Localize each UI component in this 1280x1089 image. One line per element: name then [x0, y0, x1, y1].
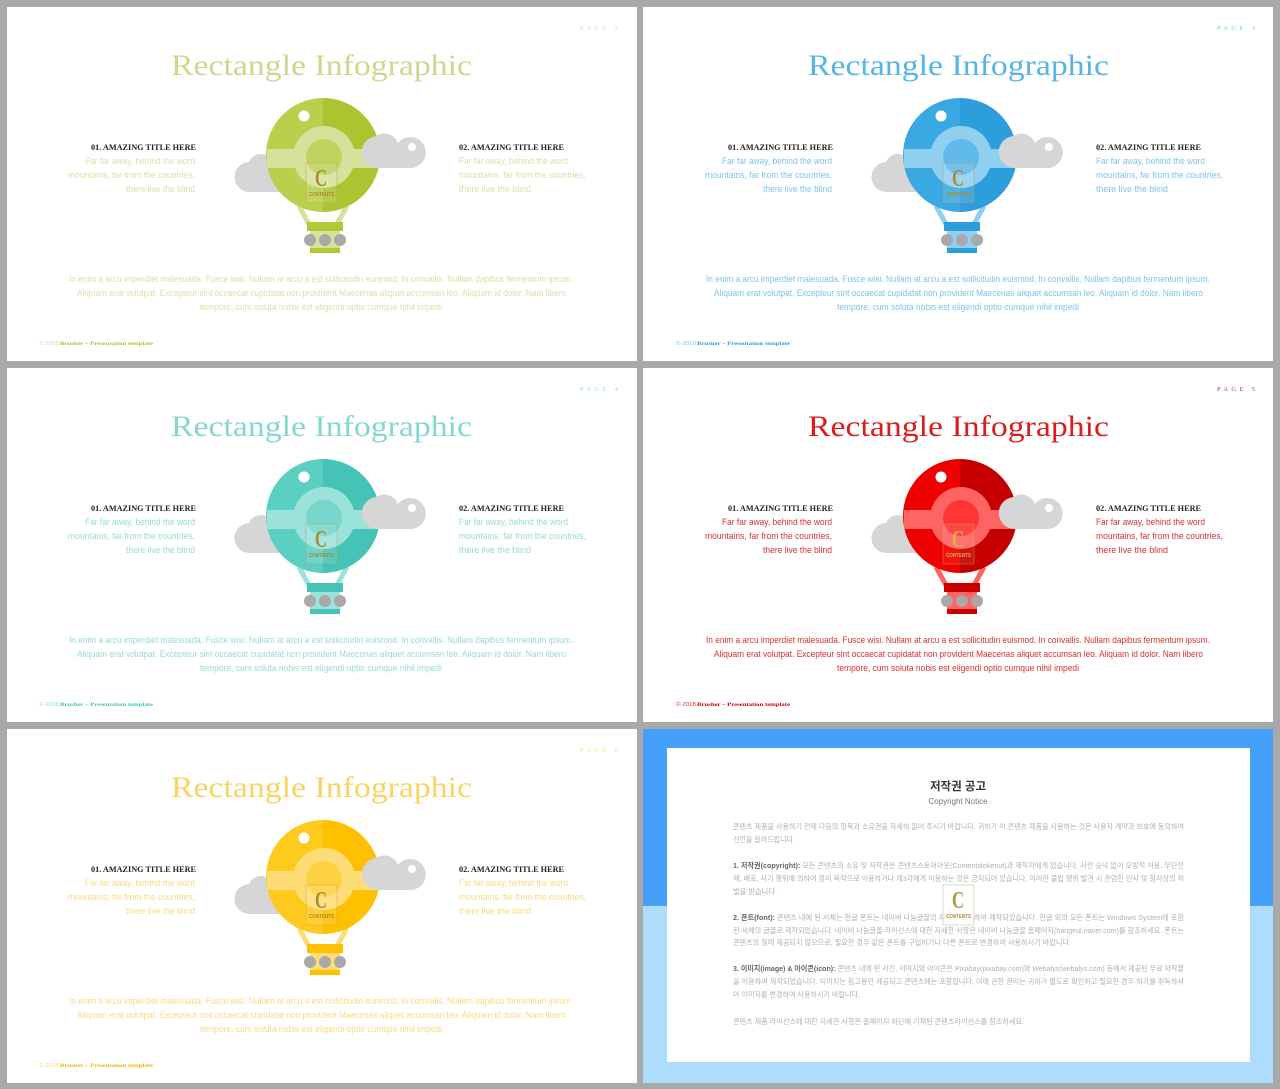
page number: PAGE 5: [1217, 386, 1255, 393]
page number: PAGE 2: [580, 25, 618, 32]
title: Rectangle Infographic: [171, 771, 472, 804]
body paragraph: In enim a arcu imperdiet malesuada. Fusce wisi. Nullam at arcu a est sollicitudin euismod. In convallis. Nullam dapibus fermentum ipsum.: [69, 274, 573, 284]
left text block: there live the blind: [763, 184, 832, 194]
right text block: Far far away, behind the word: [459, 878, 568, 888]
body paragraph: Aliquam erat volutpat. Excepteur sint occaecat cupidatat non provident Maecenas aliquet accumsan leo. Aliquam id dolor. Nam libero: [77, 1010, 566, 1020]
page number: PAGE 6: [580, 747, 619, 754]
left text block: 01. AMAZING TITLE HERE: [91, 503, 196, 513]
right text block: Far far away, behind the word: [1096, 156, 1205, 166]
body paragraph: In enim a arcu imperdiet malesuada. Fusce wisi. Nullam at arcu a est sollicitudin euismod. In convallis. Nullam dapibus fermentum ipsum.: [69, 996, 573, 1006]
right text block: there live the blind: [1096, 184, 1168, 194]
body paragraph: [69, 635, 573, 673]
body paragraph: [69, 274, 573, 312]
title: Rectangle Infographic: [171, 49, 472, 82]
right text block: 02. AMAZING TITLE HERE: [459, 142, 564, 152]
left text block: 01. AMAZING TITLE HERE: [91, 142, 196, 152]
body paragraph: tempore, cum soluta nobis est eligendi optio cumque nihil impedi: [837, 302, 1079, 312]
footer: Brusher – Presentation template: [60, 1063, 154, 1069]
body paragraph: In enim a arcu imperdiet malesuada. Fusce wisi. Nullam at arcu a est sollicitudin euismod. In convallis. Nullam dapibus fermentum ipsum.: [706, 635, 1210, 645]
watermark logo: C: [952, 527, 964, 553]
left text block: Far far away, behind the word: [85, 878, 195, 888]
section 3: image and icon: 야 이미지를 변경하여 사용하시기 바랍니다.: [733, 989, 860, 999]
title: Rectangle Infographic: [171, 410, 472, 443]
watermark logo: C: [315, 888, 327, 914]
footer: [676, 701, 791, 708]
right text block: Far far away, behind the word: [459, 156, 568, 166]
panel: blue slide: [643, 7, 1273, 361]
icon: hot air balloon with clouds: [871, 98, 1063, 253]
right text block: [459, 864, 586, 916]
section 1: copyright: 1. 저작권(copyright): 모든 콘텐츠의 소유 및 저작권은 콘텐츠스토어아웃(Contentstokeout)과 제작자에게 있습니다. 사전 승낙 없이 모방적 이용, 무단전: [733, 860, 1184, 870]
title: Rectangle Infographic: [808, 410, 1109, 443]
watermark logo: [943, 524, 974, 564]
right text block: there live the blind: [459, 906, 531, 916]
right text block: mountains, far from the countries,: [459, 170, 586, 180]
left text block: [705, 142, 833, 194]
left text block: [68, 142, 196, 194]
footer: © 2018: [39, 1062, 59, 1069]
footer: [39, 340, 154, 347]
left text block: Far far away, behind the word: [85, 156, 195, 166]
watermark logo: CONTENTS: [309, 914, 335, 920]
watermark logo: CONTENTS: [946, 192, 972, 198]
right text block: Far far away, behind the word: [1096, 517, 1205, 527]
body paragraph: Aliquam erat volutpat. Excepteur sint occaecat cupidatat non provident Maecenas aliquet accumsan leo. Aliquam id dolor. Nam libero: [77, 649, 566, 659]
left text block: there live the blind: [126, 906, 195, 916]
right text block: 02. AMAZING TITLE HERE: [1096, 142, 1201, 152]
section 3: image and icon: [733, 963, 1184, 999]
right text block: 02. AMAZING TITLE HERE: [459, 503, 564, 513]
left text block: there live the blind: [763, 545, 832, 555]
right text block: there live the blind: [459, 184, 531, 194]
left text block: there live the blind: [126, 184, 195, 194]
body paragraph: [69, 996, 573, 1034]
footer: [39, 1062, 154, 1069]
panel: copyright notice: [643, 729, 1273, 1083]
left text block: mountains, far from the countries,: [68, 170, 195, 180]
watermark logo: CONTENTS: [309, 192, 335, 198]
section 1: copyright: [733, 860, 1184, 896]
title: Rectangle Infographic: [808, 49, 1109, 82]
right text block: [459, 503, 586, 555]
watermark logo: [306, 163, 337, 203]
icon: hot air balloon with clouds: [234, 98, 426, 253]
body paragraph: [706, 635, 1210, 673]
left text block: 01. AMAZING TITLE HERE: [728, 503, 833, 513]
section 1: copyright: 재, 배포, 사기 행위에 의하여 영리 목적으로 이용하거나 제3자에게 이용하는 것은 금지되어 있습니다. 이러한 불법 행위 발견 시 준엄한 민사 및 형사상의 처: [733, 873, 1184, 883]
footer: © 2018: [39, 701, 59, 708]
panel: yellow slide: [7, 729, 637, 1083]
watermark logo: CONTENTS: [946, 914, 972, 920]
footer: Brusher – Presentation template: [60, 341, 154, 347]
watermark logo: C: [315, 527, 327, 553]
section 2: font: 콘텐츠의 형태 제공되지 않으므로, 필요한 경우 같은 폰트를 구입하거나 다른 폰트로 변경하여 사용하시기 바랍니다.: [733, 937, 1071, 947]
watermark logo: C: [952, 888, 964, 914]
section 1: copyright: 벌을 받습니다.: [733, 886, 777, 896]
body paragraph: In enim a arcu imperdiet malesuada. Fusce wisi. Nullam at arcu a est sollicitudin euismod. In convallis. Nullam dapibus fermentum ipsum.: [706, 274, 1210, 284]
intro paragraph: 선언을 알려드립니다.: [733, 834, 795, 844]
left text block: 01. AMAZING TITLE HERE: [728, 142, 833, 152]
watermark logo: [306, 524, 337, 564]
body paragraph: tempore, cum soluta nobis est eligendi optio cumque nihil impedi: [200, 302, 442, 312]
body paragraph: tempore, cum soluta nobis est eligendi optio cumque nihil impedi: [200, 1024, 442, 1034]
intro paragraph: 콘텐츠 제품을 사용하기 전에 다음의 항목과 소유권을 자세히 읽어 주시기 바랍니다. 귀하가 이 콘텐츠 제품을 사용하는 것은 사용자 계약과 보호에 동의하여: [733, 821, 1184, 831]
footer: Brusher – Presentation template: [697, 341, 791, 347]
left text block: there live the blind: [126, 545, 195, 555]
footer: © 2018: [39, 340, 59, 347]
right text block: mountains, far from the countries,: [1096, 531, 1223, 541]
panel: red slide: [643, 368, 1273, 722]
left text block: Far far away, behind the word: [722, 517, 832, 527]
watermark logo: CONTENTS: [309, 553, 335, 559]
left text block: [68, 503, 196, 555]
left text block: Far far away, behind the word: [85, 517, 195, 527]
right text block: mountains, far from the countries,: [459, 892, 586, 902]
right text block: 02. AMAZING TITLE HERE: [1096, 503, 1201, 513]
body paragraph: [706, 274, 1210, 312]
right text block: Far far away, behind the word: [459, 517, 568, 527]
section 2: font: 된 서체의 글꼴로 제작되었습니다. 네이버 나눔글꼴 라이선스에 대한 자세한 사항은 네이버 나눔글꼴 홈페이지(hangeul.naver.com)를 참조하세요. 폰트는: [733, 925, 1184, 935]
watermark logo: [306, 885, 337, 925]
body paragraph: In enim a arcu imperdiet malesuada. Fusce wisi. Nullam at arcu a est sollicitudin euismod. In convallis. Nullam dapibus fermentum ipsum.: [69, 635, 573, 645]
page number: PAGE 3: [1217, 25, 1255, 32]
watermark logo: CONTENTS: [946, 553, 972, 559]
footer: [39, 701, 154, 708]
body paragraph: Aliquam erat volutpat. Excepteur sint occaecat cupidatat non provident Maecenas aliquet accumsan leo. Aliquam id dolor. Nam libero: [714, 288, 1203, 298]
notice heading: 저작권 공고: [930, 779, 986, 793]
left text block: mountains, far from the countries,: [705, 170, 832, 180]
left text block: mountains, far from the countries,: [68, 892, 195, 902]
icon: hot air balloon with clouds: [234, 820, 426, 975]
section 2: font: 2. 폰트(font): 콘텐츠 내에 된 서체는 한글 폰트는 네이버 나눔글꼴의 저작권 표시하여 제작되었습니다. 한글 외의 모든 폰트는 Windows System에 포함: [733, 912, 1184, 922]
body paragraph: Aliquam erat volutpat. Excepteur sint occaecat cupidatat non provident Maecenas aliquet accumsan leo. Aliquam id dolor. Nam libero: [77, 288, 566, 298]
intro paragraph: [733, 821, 1184, 844]
right text block: 02. AMAZING TITLE HERE: [459, 864, 564, 874]
body paragraph: tempore, cum soluta nobis est eligendi optio cumque nihil impedi: [200, 663, 442, 673]
right text block: there live the blind: [459, 545, 531, 555]
closing line: 콘텐츠 제품 라이선스에 대한 자세한 사항은 홈페이지 하단에 기재된 콘텐츠라이선스를 참조하세요.: [733, 1016, 1024, 1026]
left text block: mountains, far from the countries,: [705, 531, 832, 541]
page number: PAGE 4: [580, 386, 619, 393]
watermark logo: [943, 885, 974, 925]
footer: Brusher – Presentation template: [60, 702, 154, 708]
section 3: image and icon: 3. 이미지(image) & 아이콘(icon): 콘텐츠 내에 된 사진, 이미지와 아이콘은 Pixabay(pixabay.com)와 Webalys(webalys.com) 등에서 제공된 무료 저작물: [733, 963, 1184, 973]
panel: teal slide: [7, 368, 637, 722]
right text block: [459, 142, 586, 194]
icon: hot air balloon with clouds: [871, 459, 1063, 614]
right text block: [1096, 142, 1223, 194]
watermark logo: C: [952, 166, 964, 192]
right text block: there live the blind: [1096, 545, 1168, 555]
section 2: font: [733, 912, 1184, 947]
right text block: mountains, far from the countries,: [1096, 170, 1223, 180]
footer: [676, 340, 791, 347]
left text block: 01. AMAZING TITLE HERE: [91, 864, 196, 874]
left text block: [705, 503, 833, 555]
icon: hot air balloon with clouds: [234, 459, 426, 614]
panel: green slide: [7, 7, 637, 361]
left text block: [68, 864, 196, 916]
footer: © 2018: [676, 701, 696, 708]
right text block: [1096, 503, 1223, 555]
watermark logo: C: [315, 166, 327, 192]
watermark logo: [943, 163, 974, 203]
right text block: mountains, far from the countries,: [459, 531, 586, 541]
footer: Brusher – Presentation template: [697, 702, 791, 708]
section 3: image and icon: 을 이용하여 제작되었습니다. 이미지는 참고용만 제공되고 콘텐츠에는 포함합니다. 이에 관한 권리는 귀하가 별도로 확인하고 필요한 경우 허가를 취득하셔: [733, 976, 1184, 986]
left text block: mountains, far from the countries,: [68, 531, 195, 541]
footer: © 2018: [676, 340, 696, 347]
body paragraph: Aliquam erat volutpat. Excepteur sint occaecat cupidatat non provident Maecenas aliquet accumsan leo. Aliquam id dolor. Nam libero: [714, 649, 1203, 659]
notice subheading: Copyright Notice: [928, 797, 988, 806]
left text block: Far far away, behind the word: [722, 156, 832, 166]
body paragraph: tempore, cum soluta nobis est eligendi optio cumque nihil impedi: [837, 663, 1079, 673]
